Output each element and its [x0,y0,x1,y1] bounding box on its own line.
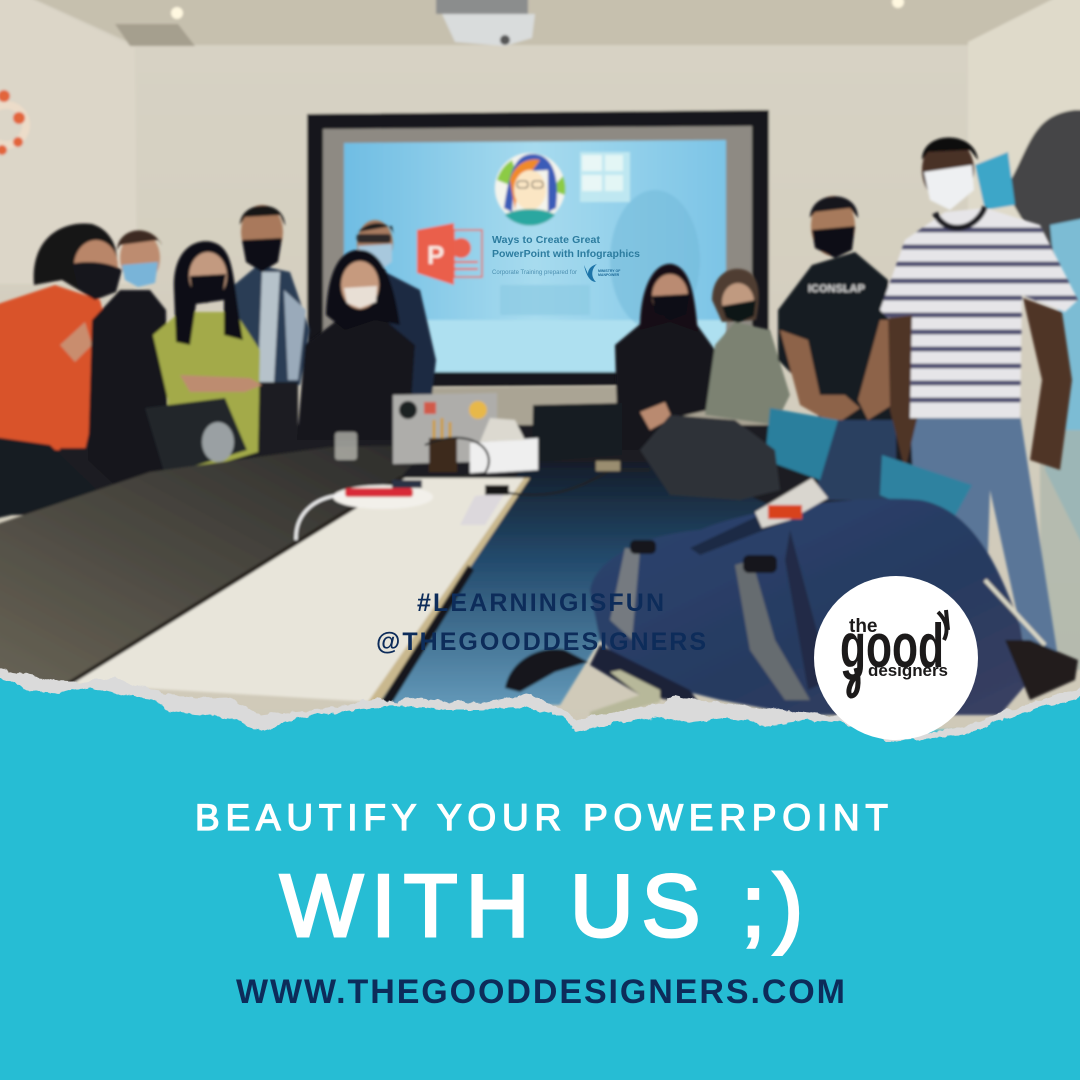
logo badge: the good designers: good [840,612,944,681]
table: blue section [378,462,770,705]
room walls and ceiling [0,0,1080,730]
pencil cup [429,418,457,472]
black laptop [532,403,622,462]
table: white section [72,478,530,702]
remote and small items [460,461,620,525]
website url: WWW.THEGOODDESIGNERS.COM [236,973,845,1011]
photo: training room group shot [0,0,1080,730]
torn paper edge and teal panel [0,660,1080,1080]
dark background behind the table [0,425,980,515]
tissue box [470,418,538,474]
person: woman in black, centre [297,250,415,440]
person: man in black tee [778,196,896,500]
screen: presentation title text: PowerPoint with Infographics [492,248,640,260]
headline: with us: WITH US ;) [280,856,803,955]
logo badge: the good designers: the [849,616,878,637]
person: tall man in striped shirt [870,138,1080,672]
person: man in jacket [228,205,310,450]
projection screen frame [307,110,769,388]
dark grey bag on table [640,415,780,500]
person: man in black tee: ICONSLAP [808,283,865,295]
person: woman in black, right of screen [615,264,715,450]
table: dark section [0,445,430,684]
logo badge: the good designers: designers [868,661,948,680]
screen: presentation title text: Corporate Training prepared for [492,270,577,276]
screen: presentation title text: MANPOWER [598,273,620,277]
cables on table [296,438,650,540]
screen: presentation title text: Ways to Create Great [492,234,600,246]
hashtag overlay text: @THEGOODDESIGNERS [376,628,706,656]
screen: presenter avatar [495,153,566,226]
wall ledge behind the table [345,385,770,430]
large navy backpack [505,478,1078,720]
left chair and dark backpack [0,398,247,522]
screen: PowerPoint icon [417,223,482,285]
logo badge: the good designers [814,576,978,740]
wall decoration: orange ring [0,90,26,155]
screen: presentation title text [492,234,640,282]
water glass [335,432,357,460]
plate with red items [333,480,433,509]
person: woman with orange shirt [0,224,122,490]
person: woman with blue mask [88,230,168,490]
right wall chair and cushions [975,110,1080,670]
laptop on table [393,393,497,464]
screen: PowerPoint icon: P [427,240,444,270]
teal office chairs [765,408,972,525]
person: man in navy at back [356,220,436,395]
projector [436,0,535,46]
screen: presentation title text: MINISTRY OF [598,269,621,273]
headline: beautify your powerpoint: BEAUTIFY YOUR POWERPOINT [195,797,888,838]
person: woman in sage sweater [705,269,790,425]
hashtag overlay text [376,589,706,656]
hashtag overlay text: #LEARNINGISFUN [417,589,664,617]
person: woman in green dress [153,241,262,480]
